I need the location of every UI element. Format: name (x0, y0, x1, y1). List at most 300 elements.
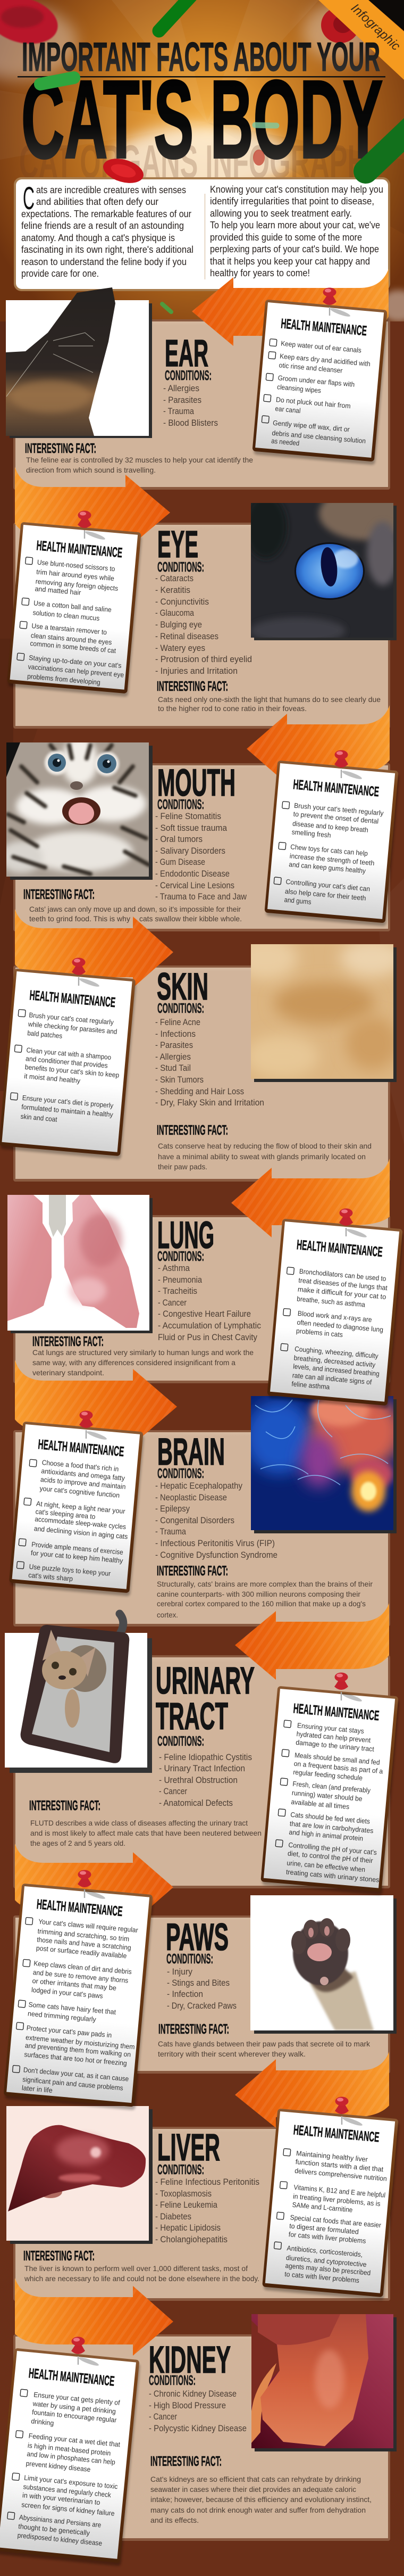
heading: mouth: MOUTH (157, 762, 235, 804)
note: liver health maintenance: to cats with liver problems (284, 2270, 360, 2284)
section: mouth (0, 705, 390, 931)
note: lung health maintenance: feline asthma (291, 1380, 331, 1391)
heading: skin: SKIN (157, 966, 208, 1008)
note: paws health maintenance: and preventing them from walking on (24, 2041, 131, 2059)
note: kidney health maintenance: is high in meat-based protein (27, 2441, 111, 2457)
note: urinary tract health maintenance (260, 1672, 400, 1895)
interesting fact (157, 1122, 372, 1171)
conditions list: - Gum Disease (155, 857, 205, 867)
note: liver health maintenance: delivers comprehensive nutrition (294, 2167, 387, 2183)
conditions list: - Skin Tumors (155, 1075, 204, 1085)
interesting fact: INTERESTING FACT: (157, 678, 228, 694)
note: eye health maintenance: problems from developing (27, 672, 100, 687)
note: brain health maintenance: Choose a food that's rich in (41, 1458, 119, 1473)
conditions list: - Urethral Obstruction (159, 1775, 238, 1785)
conditions list: - Anatomical Defects (159, 1798, 233, 1808)
interesting fact: The feline ear is controlled by 32 muscles to help your cat identify the (26, 456, 253, 464)
note: lung health maintenance: levels, and increased breathing (293, 1362, 380, 1378)
note: kidney health maintenance: prevent kidney disease (26, 2459, 91, 2473)
intro text: right column: that it helps you keep your cat happy and (210, 255, 370, 267)
heading: kidney: KIDNEY (149, 2339, 231, 2381)
note: brain health maintenance: At night, keep a light near your (36, 1499, 126, 1515)
note: paws health maintenance: Some cats have hairy feet that (28, 2001, 116, 2016)
note: ear health maintenance (252, 287, 389, 465)
photo: kitten in litter box (5, 1614, 152, 1773)
interesting fact: canine counterparts- with 300 million neurons composing their (157, 1590, 360, 1598)
intro text: left column: and abilities that often defy our (36, 196, 158, 207)
header background (0, 0, 404, 322)
interesting fact: INTERESTING FACT: (158, 2021, 229, 2037)
conditions label: CONDITIONS: (157, 1000, 204, 1016)
intro text: right column: allowing you to seek treatment early. (210, 208, 352, 219)
interesting fact: INTERESTING FACT: (23, 886, 95, 902)
intro text: left column: C (23, 180, 35, 216)
conditions list: - Dry, Cracked Paws (167, 2001, 237, 2011)
note: mouth health maintenance: and gums (284, 896, 312, 906)
interesting fact: have a minimal ability to sweat with glands primarily located on (158, 1152, 366, 1161)
note: liver health maintenance: Antibiotics, corticosteroids, (287, 2244, 363, 2259)
note: urinary tract health maintenance: hydrated can help prevent (296, 1730, 371, 1744)
note: skin health maintenance: it moist and healthy (24, 1072, 81, 1085)
conditions list: - Soft tissue trauma (155, 823, 227, 833)
note: paws health maintenance: lodged in your cat's paws (31, 1986, 104, 2000)
note: brain health maintenance: Use puzzle toys to keep your (29, 1563, 111, 1578)
note: ear health maintenance: Gently wipe off wax, dirt or (273, 419, 350, 433)
intro text: left column: ats are incredible creatures with senses (36, 184, 186, 195)
panel: lung (13, 1215, 390, 1383)
note: paws health maintenance: extreme weather by moisturizing them (26, 2033, 135, 2051)
note: kidney health maintenance: Limit your cat's exposure to toxic (24, 2473, 119, 2490)
conditions list: - Feline Stomatitis (155, 811, 221, 821)
intro text: right column: provided this guide to some of the more (210, 232, 362, 243)
intro text: right column: identify irregularities that point to disease, (210, 195, 374, 207)
note: kidney health maintenance: Abyssinians and Persians are (19, 2513, 102, 2529)
section: brain (13, 1360, 401, 1626)
note: urinary tract health maintenance: Meals should be small and fed (294, 1751, 380, 1766)
conditions list (155, 2177, 259, 2244)
note: paws health maintenance: trimming and scratching, so trim (37, 1927, 130, 1943)
bacteria: top centre green capsule (159, 0, 191, 31)
heading: urinary tract: URINARY (156, 1660, 255, 1702)
note: eye health maintenance: Use blunt-nosed scissors to (37, 558, 115, 573)
panel: skin (13, 965, 390, 1182)
conditions list: - Congestive Heart Failure (158, 1309, 251, 1319)
intro text: left column: provide care for one. (21, 268, 99, 279)
conditions list (163, 383, 218, 428)
photo: cat paw (250, 1895, 397, 2034)
note: paws health maintenance: surfaces that are too hot or freezing (24, 2050, 127, 2067)
interesting fact: INTERESTING FACT: (32, 1333, 104, 1349)
note: urinary tract health maintenance: urine, can be effective when (287, 1859, 366, 1873)
photo: glowing brain (245, 1392, 401, 1533)
conditions label: CONDITIONS: (157, 1465, 204, 1481)
section: kidney (13, 2278, 397, 2541)
arrow: kidney (15, 2278, 173, 2356)
section: urinary tract (5, 1603, 390, 1888)
note: brain health maintenance: cat's wits sharp (28, 1571, 73, 1583)
interesting fact (150, 2453, 372, 2524)
intro text: left column: reason to understand the feline body if you (21, 256, 187, 267)
photo: blue cat eye (251, 503, 397, 640)
section: eye (13, 467, 404, 729)
section: skin (13, 909, 404, 1182)
note: skin health maintenance: HEALTH MAINTENANCE (29, 987, 116, 1010)
note: skin health maintenance: Brush your cat's coat regularly (29, 1011, 114, 1026)
note: urinary tract health maintenance: and high in animal protein (289, 1828, 364, 1843)
note: brain health maintenance: HEALTH MAINTENANCE (38, 1436, 125, 1459)
note: mouth health maintenance: increase the strength of teeth (289, 852, 375, 867)
ribbon: Infographic (318, 0, 404, 80)
conditions list (159, 1752, 252, 1808)
note: skin health maintenance: skin and coat (20, 1112, 58, 1124)
ribbon: Infographic: Infographic (348, 1, 403, 53)
interesting fact: cortex. (157, 1611, 178, 1619)
note: kidney health maintenance: in with your veterinarian to (22, 2491, 100, 2506)
note: skin health maintenance: benefits to your cat's skin to keep (24, 1063, 120, 1079)
conditions list: - Cholangiohepatitis (155, 2234, 228, 2244)
conditions list: - Shedding and Hair Loss (155, 1086, 244, 1096)
note: eye health maintenance: clean stains around the eyes (30, 631, 112, 646)
photo: lungs (7, 1195, 153, 1333)
note: lung health maintenance: Coughing, wheezing, difficulty (294, 1345, 379, 1360)
heading: lung: LUNG (157, 1215, 214, 1257)
conditions list: - Parasites (155, 1040, 193, 1050)
conditions list: - Hepatic Ecephalopathy (155, 1481, 242, 1491)
note: urinary tract health maintenance: on a frequent basis as part of a (293, 1760, 384, 1775)
arrow: urinary tract (235, 1603, 389, 1680)
interesting fact: FLUTD describes a wide class of diseases affecting the urinary tract (30, 1819, 248, 1827)
note: brain health maintenance: Provide ample means of exercise (31, 1540, 123, 1556)
interesting fact: veterinary standpoint. (32, 1368, 104, 1377)
note: liver health maintenance: to digest are formulated (289, 2222, 359, 2236)
interesting fact: Structurally, cats' brains are more complex than the brains of their (157, 1580, 373, 1588)
conditions list: - Injuries and Irritation (155, 666, 238, 676)
conditions list: - Oral tumors (155, 834, 203, 844)
note: eye health maintenance: Use a cotton ball and saline (33, 599, 112, 614)
note: liver health maintenance: for cats with liver problems (288, 2230, 367, 2245)
conditions list: - Infectious Peritonitis Virus (FIP) (155, 1538, 275, 1548)
note: mouth health maintenance: disease and to keep breath (292, 819, 368, 834)
conditions list: - Feline Acne (155, 1017, 200, 1027)
note: brain health maintenance: accommodate sleep-wake cycles (35, 1515, 127, 1531)
note: ear health maintenance: Keep ears dry and acidified with (280, 352, 371, 368)
heading: urinary tract (156, 1660, 255, 1738)
note: brain health maintenance: for your cat to keep him healthy (30, 1549, 123, 1565)
conditions list: - Conjunctivitis (155, 597, 209, 607)
conditions list: - Asthma (158, 1263, 190, 1273)
note: urinary tract health maintenance: regular feeding schedule (293, 1768, 363, 1782)
interesting fact: cats swallow their kibble whole. (139, 914, 242, 923)
note: lung health maintenance: Blood work and x-rays are (297, 1309, 372, 1324)
note: paws health maintenance: Don't declaw your cat, as it can cause (23, 2066, 129, 2083)
note: eye health maintenance: removing any foreign objects (35, 577, 119, 592)
conditions list: - Protrusion of third eyelid (155, 654, 252, 664)
interesting fact: INTERESTING FACT: (150, 2453, 222, 2469)
note: urinary tract health maintenance: Fresh, clean (and preferably (292, 1780, 371, 1795)
conditions list: - Blood Blisters (163, 418, 218, 428)
conditions list: - Feline Idiopathic Cystitis (159, 1752, 252, 1762)
interesting fact: which are necessary to life and could not be done elsewhere in the body. (24, 2274, 259, 2283)
panel: kidney (13, 2334, 390, 2541)
note: ear health maintenance: Groom under ear flaps with (277, 374, 355, 389)
conditions list: - Injury (167, 1967, 192, 1977)
arrow: skin (15, 909, 173, 988)
interesting fact (157, 1563, 373, 1619)
note: paws health maintenance: or other irritants that may be (32, 1977, 117, 1992)
note: skin health maintenance (0, 958, 137, 1159)
panel: liver (13, 2127, 390, 2301)
conditions list: - Chronic Kidney Disease (149, 2389, 237, 2399)
note: eye health maintenance: common in some breeds of cat (30, 639, 116, 655)
note: urinary tract health maintenance: damage to the urinary tract (296, 1738, 375, 1753)
bacteria: faded pill (255, 125, 276, 126)
conditions list: - Endodontic Disease (155, 869, 230, 879)
note: liver health maintenance: agents may also be prescribed (285, 2261, 371, 2277)
note: mouth health maintenance: to prevent the onset of dental (293, 810, 379, 825)
note: liver health maintenance: Vitamins K, B12 and E are helpful (293, 2183, 386, 2199)
interesting fact: their paw pads. (158, 1162, 207, 1171)
interesting fact: The liver is known to perform well over 1,000 different tasks, most of (24, 2264, 248, 2273)
conditions list: - Infection (167, 1989, 203, 1999)
conditions list: - Retinal diseases (155, 631, 218, 641)
interesting fact: INTERESTING FACT: (25, 440, 96, 456)
conditions list: - Salivary Disorders (155, 846, 225, 856)
conditions label: CONDITIONS: (157, 2161, 204, 2177)
conditions list: - Polycystic Kidney Disease (149, 2423, 247, 2433)
interesting fact: direction from which sound is travelling. (26, 466, 156, 474)
note: kidney health maintenance: HEALTH MAINTENANCE (28, 2365, 115, 2389)
conditions list: - Cancer (159, 1786, 187, 1796)
note: kidney health maintenance (0, 2336, 140, 2566)
conditions list: - Diabetes (155, 2211, 191, 2222)
intro text: left column: fascinating in its own right, there's additional (21, 244, 193, 255)
heading: eye: EYE (157, 524, 198, 566)
arrow: lung (231, 1159, 390, 1237)
blood cell: top right (321, 7, 359, 43)
note: kidney health maintenance: thought to be genetically (18, 2522, 90, 2537)
note: skin health maintenance: and conditioner that provides (26, 1054, 108, 1070)
interesting fact: Cat lungs are structured very similarly to human lungs and work the (32, 1348, 254, 1357)
note: brain health maintenance: your cat's cognitive function (39, 1484, 120, 1499)
conditions list: - Feline Infectious Peritonitis (155, 2177, 259, 2187)
note: paws health maintenance: and be sure to remove any thorns (32, 1968, 129, 1985)
interesting fact (23, 2248, 259, 2283)
conditions list: - Keratitis (155, 585, 190, 595)
section: ear (6, 269, 390, 490)
note: liver health maintenance (262, 2097, 400, 2300)
note: urinary tract health maintenance: available at all times (291, 1798, 350, 1811)
interesting fact: territory with their scent wherever they walk. (158, 2050, 306, 2058)
interesting fact (29, 1797, 262, 1847)
interesting fact: and its effects. (150, 2516, 199, 2524)
intro text: left column: feline friends are a result of an astounding (21, 220, 184, 231)
interesting fact: intake; however, because of this efficiency and evolutionary instinct, (150, 2495, 372, 2504)
note: liver health maintenance: in treating liver problems, as is (293, 2192, 381, 2208)
bacteria: big green capsule (366, 120, 404, 171)
conditions list: - Dry, Flaky Skin and Irritation (155, 1097, 264, 1108)
note: urinary tract health maintenance: diet, to control the pH of their (287, 1849, 374, 1864)
note: brain health maintenance: acids to improve and maintain (40, 1475, 126, 1491)
interesting fact: to the higher rod to cone ratio in their foveas. (158, 704, 307, 713)
note: urinary tract health maintenance: running) water should be (291, 1789, 363, 1803)
interesting fact: Cats need only one-sixth the light that humans do to see clearly due (158, 695, 381, 704)
intro text: right column: perplexing parts of your cat's build. We hope (210, 243, 379, 254)
conditions list: - Pneumonia (158, 1275, 202, 1285)
arrow: brain (15, 1360, 177, 1444)
note: lung health maintenance (267, 1208, 404, 1409)
panel: brain (13, 1430, 390, 1626)
note: liver health maintenance: diuretics, and cytoprotective (285, 2253, 367, 2268)
interesting fact: INTERESTING FACT: (157, 1563, 228, 1579)
conditions list: - High Blood Pressure (149, 2400, 226, 2410)
note: ear health maintenance: as needed (271, 437, 300, 447)
arrow: eye (15, 467, 170, 550)
conditions list: - Allergies (155, 1052, 191, 1062)
interesting fact: INTERESTING FACT: (29, 1797, 100, 1813)
arrow: paws (15, 1844, 173, 1922)
note: lung health maintenance: Bronchodilators can be used to (299, 1267, 386, 1283)
note: mouth health maintenance: also help care for their teeth (284, 887, 366, 902)
note: urinary tract health maintenance: that are low in carbohydrates (289, 1820, 374, 1835)
photo: kidney (251, 2314, 397, 2451)
note: liver health maintenance: SAMe and L-carnitine (292, 2201, 353, 2214)
section: lung (7, 1159, 390, 1383)
intro text: left column (21, 180, 193, 279)
note: brain health maintenance: and declining vision in aging cats (33, 1524, 128, 1541)
interesting fact: INTERESTING FACT: (157, 1122, 228, 1138)
interesting fact: seawater in cases where their diet provides an adequate caloric (150, 2485, 356, 2494)
note: ear health maintenance: cleansing wipes (277, 383, 322, 394)
note: paws health maintenance (3, 1870, 154, 2110)
panel: eye (13, 523, 390, 729)
interesting fact: INTERESTING FACT: (23, 2248, 95, 2264)
conditions list: - Trauma to Face and Jaw (155, 891, 247, 902)
note: kidney health maintenance: drinking (31, 2417, 54, 2427)
intro text: right column: To help you learn more about your cat, we've (210, 219, 380, 230)
conditions list: - Trauma (155, 1526, 186, 1537)
note: liver health maintenance: function starts with a diet that (295, 2158, 384, 2173)
blood cell: red over panel (100, 154, 146, 187)
heading: brain: BRAIN (157, 1431, 225, 1473)
conditions list (155, 1017, 264, 1108)
interesting fact: same way, with any differences considered insignificant from a (32, 1358, 235, 1367)
interesting fact: teeth to grind food. This is why (29, 914, 130, 923)
conditions list: - Glaucoma (155, 608, 194, 618)
conditions list (167, 1967, 237, 2011)
conditions list: - Stings and Bites (167, 1978, 230, 1988)
interesting fact (157, 678, 381, 713)
note: brain health maintenance (9, 1410, 145, 1596)
note: paws health maintenance: HEALTH MAINTENANCE (36, 1896, 123, 1919)
conditions list: - Parasites (163, 395, 201, 405)
panel: paws (13, 1916, 390, 2074)
note: skin health maintenance: Ensure your cat's diet is properly (22, 1094, 114, 1110)
conditions list (158, 1263, 261, 1342)
conditions list: - Trauma (163, 406, 194, 416)
note: skin health maintenance: while checking for parasites and (27, 1020, 117, 1036)
arrow: mouth (247, 705, 390, 784)
interesting fact: Cat's kidneys are so efficient that cats can rehydrate by drinking (150, 2475, 361, 2483)
conditions label: CONDITIONS: (157, 559, 204, 575)
note: paws health maintenance: significant pain and cause problems (22, 2075, 124, 2092)
note: brain health maintenance: antioxidants and omega fatty (41, 1467, 125, 1482)
note: lung health maintenance: rate can all indicate signs of (292, 1371, 372, 1386)
note: skin health maintenance: Clean your cat with a shampoo (26, 1046, 112, 1061)
note: ear health maintenance: Do not pluck out hair from (275, 395, 351, 410)
note: kidney health maintenance: substances and regularly check (23, 2482, 112, 2499)
note: skin health maintenance: bald patches (27, 1029, 63, 1040)
note: mouth health maintenance: Controlling your cat's diet can (285, 878, 371, 893)
conditions list: Fluid or Pus in Chest Cavity (158, 1332, 257, 1342)
note: eye health maintenance: and matted hair (35, 584, 82, 597)
conditions list: - Infections (155, 1029, 196, 1039)
note: paws health maintenance: post or surface readily available (36, 1944, 127, 1960)
note: kidney health maintenance: predisposed to kidney disease (17, 2531, 103, 2547)
photo: cat ear (6, 287, 152, 438)
note: liver health maintenance: Maintaining healthy liver (296, 2149, 368, 2164)
note: mouth health maintenance: smelling fresh (291, 828, 331, 839)
note: lung health maintenance: treat diseases of the lungs that (298, 1276, 388, 1292)
blood cell: top left (0, 0, 63, 51)
note: liver health maintenance: Special cat foods that are easier (290, 2213, 382, 2229)
note: kidney health maintenance: water by using a pet drinking (32, 2399, 116, 2415)
intro text: left column: expectations. The remarkable features of our (21, 208, 191, 219)
note: paws health maintenance: those nails and have a scratching (37, 1935, 131, 1952)
interesting fact: Cats' jaws can only move up and down, so it's impossible for their (29, 905, 241, 913)
conditions list: - Neoplastic Disease (155, 1492, 227, 1502)
conditions list: - Cancer (149, 2412, 177, 2422)
bacteria: small green pill (162, 304, 171, 312)
note: eye health maintenance: Use a tearstain remover to (31, 622, 107, 636)
interesting fact (25, 440, 253, 474)
arrow: liver (235, 2052, 389, 2128)
conditions list: - Urinary Tract Infection (159, 1763, 245, 1773)
intro text: right column: healthy for years to come! (210, 267, 310, 278)
conditions list: - Hepatic Lipidosis (155, 2223, 221, 2233)
note: eye health maintenance: trim hair around eyes while (36, 567, 115, 582)
intro text: right column: Knowing your cat's constitution may help you (210, 184, 383, 195)
heading: ear: EAR (165, 333, 208, 375)
panel: mouth (13, 763, 390, 931)
note: ear health maintenance: ear canal (275, 404, 301, 415)
note: mouth health maintenance: Chew toys for cats can help (290, 843, 368, 857)
interesting fact: many cats do not drink enough water and suffer from dehydration (150, 2506, 366, 2514)
conditions list: - Tracheitis (158, 1286, 197, 1296)
conditions list: - Cancer (158, 1298, 187, 1308)
heading: liver: LIVER (157, 2127, 220, 2169)
photo: cat fur (251, 944, 397, 1082)
heading: urinary tract: TRACT (156, 1696, 228, 1738)
panel: urinary tract (13, 1655, 390, 1888)
conditions list (149, 2389, 247, 2433)
note: kidney health maintenance: Feeding your cat a wet diet that (28, 2432, 121, 2448)
note: mouth health maintenance: Brush your cat's teeth regularly (294, 802, 384, 817)
conditions label: CONDITIONS: (157, 796, 204, 812)
note: lung health maintenance: often needed to diagnose lung (297, 1318, 384, 1334)
note: ear health maintenance: otic rinse and cleanser (279, 361, 343, 375)
conditions list: - Allergies (163, 383, 199, 393)
conditions label: CONDITIONS: (165, 367, 212, 383)
note: paws health maintenance: Protect your cat's paw pads in (26, 2024, 112, 2039)
conditions label: CONDITIONS: (157, 1248, 204, 1264)
note: paws health maintenance: Your cat's claws will require regular (38, 1918, 139, 1934)
note: mouth health maintenance: and can keep gums healthy (289, 860, 366, 875)
conditions list: - Cervical Line Lesions (155, 880, 234, 890)
conditions list: - Epilepsy (155, 1504, 190, 1514)
conditions label: CONDITIONS: (157, 1733, 204, 1749)
photo: liver (6, 2106, 153, 2244)
note: lung health maintenance: breathing, decreased activity (293, 1353, 376, 1369)
